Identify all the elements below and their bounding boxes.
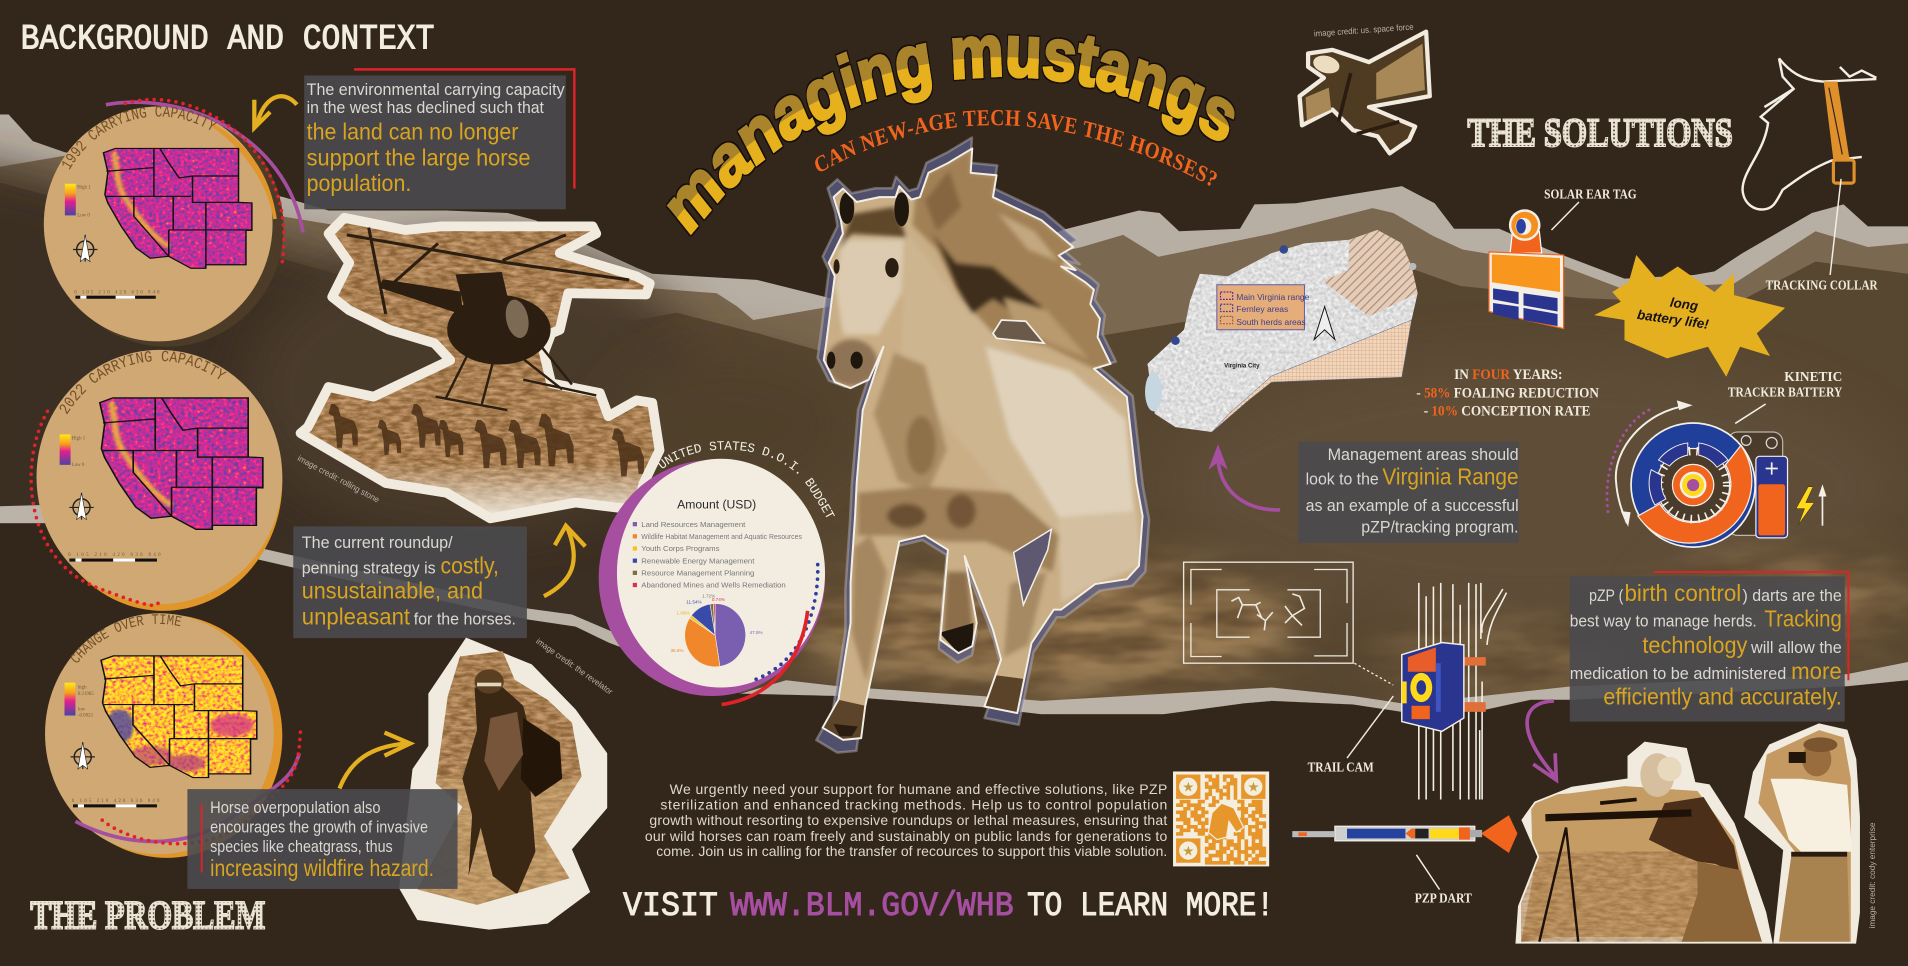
circuit board bbox=[1728, 432, 1783, 535]
text box: pZP darts: medication to be administered bbox=[1570, 665, 1786, 683]
rotor bbox=[1631, 423, 1755, 547]
text box: pZP darts: ) darts are the bbox=[1743, 587, 1842, 605]
pie labels bbox=[670, 593, 763, 653]
QR code: ★ bbox=[1247, 780, 1259, 795]
Virginia Range map bbox=[1144, 225, 1424, 438]
subtitle arc: CAN NEW-AGE TECH SAVE THE HORSES? bbox=[815, 110, 1217, 186]
text box: Virginia range: Virginia Range bbox=[1382, 463, 1519, 489]
arrow: to 1992 map bbox=[254, 96, 297, 128]
mane bbox=[913, 148, 1111, 369]
up arrow bbox=[1821, 492, 1823, 526]
map circle: change over time: 0 105 210 420 630 840 bbox=[72, 799, 160, 804]
text box: carrying capacity: The environmental carrying capacity bbox=[307, 81, 565, 99]
photo credit: the revelator: image credit: the revelator bbox=[534, 636, 615, 697]
stat block: PZP results: - 58% FOALING REDUCTION bbox=[1416, 385, 1599, 401]
pie chart panel: U.S. D.O.I. budget bbox=[598, 441, 835, 706]
pie labels: 1.69% bbox=[677, 611, 690, 616]
arrow: to firefighter bbox=[339, 733, 410, 789]
lower gray ridge bbox=[0, 505, 45, 524]
stat block: PZP results: IN FOUR YEARS: bbox=[1454, 367, 1562, 383]
text box: roundup strategy: unpleasant bbox=[302, 604, 411, 630]
map circle: change over time: -0.0823 bbox=[78, 714, 93, 719]
text box: pZP darts: efficiently and accurately. bbox=[1603, 684, 1842, 710]
label: PZP DART bbox=[1415, 892, 1472, 907]
text box: pZP darts: best way to manage herds. bbox=[1570, 613, 1757, 631]
text box: carrying capacity: support the large horse bbox=[307, 144, 531, 170]
QR code: ★ bbox=[1182, 843, 1194, 858]
icon: tree trunks bbox=[1419, 583, 1506, 799]
landscape photo band bbox=[0, 110, 1908, 754]
battery bbox=[1756, 456, 1788, 538]
pie bbox=[685, 604, 746, 667]
text box: pZP darts: will allow the bbox=[1750, 639, 1842, 657]
text box: wildfire hazard bbox=[187, 789, 458, 889]
map bbox=[101, 656, 257, 778]
map circle: change over time: high bbox=[78, 686, 87, 691]
map circle: 1992 carrying capacity: High 1 bbox=[77, 186, 91, 191]
text box: Virginia range: as an example of a successful bbox=[1306, 497, 1519, 515]
legend: Renewable Energy Management bbox=[641, 556, 755, 565]
call-to-action paragraph: sterilization and enhanced tracking methods. Help us to control population bbox=[660, 796, 1167, 812]
place label: Virginia City bbox=[1224, 362, 1260, 369]
legend bbox=[60, 434, 71, 465]
text box: carrying capacity: in the west has declined such that bbox=[307, 99, 544, 117]
text box: pZP darts: technology bbox=[1642, 632, 1748, 658]
call-to-action paragraph: come. Join us in calling for the transfer of recources to support this viable solution. bbox=[656, 843, 1167, 859]
heading: background and context: BACKGROUND AND CONTEXT bbox=[21, 20, 434, 60]
stat block: PZP results: - 10% CONCEPTION RATE bbox=[1424, 404, 1590, 420]
label: KINETIC bbox=[1784, 369, 1842, 384]
photo cutout: helicopter and horses bbox=[292, 207, 669, 529]
compass bbox=[73, 235, 97, 262]
legend: Wildlife Habitat Management and Aquatic Resources bbox=[641, 532, 802, 541]
herd silhouettes bbox=[329, 404, 644, 477]
arc label: 2022 CARRYING CAPACITY bbox=[60, 350, 227, 414]
stat block: PZP results bbox=[1416, 367, 1599, 420]
call-to-action paragraph: growth without resorting to expensive roundups or lethal measures, ensuring that bbox=[649, 812, 1167, 828]
text box: roundup strategy bbox=[293, 526, 527, 638]
title arc: managing mustangs bbox=[666, 34, 1236, 236]
scale bar bbox=[73, 804, 157, 807]
arrow: to dart team bbox=[1527, 701, 1556, 780]
label: trail cam: TRAIL CAM bbox=[1308, 760, 1374, 775]
QR horse head bbox=[1208, 803, 1244, 840]
photo cutout: darting team bbox=[1517, 725, 1858, 942]
scale bar bbox=[75, 296, 156, 299]
kinetic tracker battery bbox=[1607, 369, 1843, 547]
horse shadow bbox=[816, 138, 1149, 753]
label: TRACKING COLLAR bbox=[1766, 279, 1878, 294]
call to action: visit website bbox=[623, 888, 1274, 926]
icon: solar ear tag bbox=[1489, 187, 1637, 329]
compass bbox=[71, 742, 95, 769]
map circle: 1992 carrying capacity: 0 105 210 420 630 840 bbox=[74, 290, 160, 295]
pie labels: 36.6% bbox=[670, 648, 684, 653]
photo credit: space force: image credit: us. space force bbox=[1314, 22, 1414, 39]
icon: horse with tracking collar bbox=[1743, 58, 1878, 294]
map circle: 2022 carrying capacity: 0 105 210 420 630 840 bbox=[68, 553, 161, 558]
text box: roundup strategy: The current roundup/ bbox=[302, 534, 453, 552]
southern herd area bbox=[1212, 320, 1412, 432]
text box: roundup strategy: for the horses. bbox=[414, 611, 516, 629]
lightning bbox=[1796, 487, 1814, 524]
mid hills bbox=[0, 183, 1908, 730]
map bbox=[100, 398, 263, 529]
text box: roundup strategy: costly, bbox=[440, 553, 499, 579]
text box: carrying capacity bbox=[304, 69, 574, 209]
legend: Resource Management Planning bbox=[641, 569, 754, 578]
kinetic tracker battery: TRACKER BATTERY bbox=[1728, 385, 1843, 400]
text box: carrying capacity: population. bbox=[307, 170, 411, 196]
text box: wildfire hazard: species like cheatgrass, thus bbox=[210, 838, 393, 856]
near shading bbox=[0, 131, 620, 647]
map circle: change over time: 0.21965 bbox=[78, 692, 94, 697]
call-to-action paragraph bbox=[645, 781, 1168, 859]
head bbox=[835, 240, 904, 335]
observer bbox=[1746, 725, 1858, 942]
pie labels: 1.72% bbox=[702, 593, 715, 598]
map circle: 2022 carrying capacity bbox=[29, 350, 282, 611]
arrow: to Virginia map bbox=[1218, 450, 1280, 510]
text box: wildfire hazard: increasing wildfire hazard. bbox=[210, 855, 434, 881]
shooter figure bbox=[1649, 797, 1740, 876]
firefighter figure bbox=[462, 669, 562, 894]
legend bbox=[64, 683, 75, 716]
starburst: long battery life: long bbox=[1669, 295, 1699, 314]
icon: PZP dart bbox=[1292, 815, 1517, 907]
arrow: to pie chart bbox=[544, 526, 585, 596]
call-to-action paragraph: our wild horses can roam freely and sustainably on public lands for generations to bbox=[645, 828, 1168, 844]
photo cutout: firefighter bbox=[399, 638, 607, 930]
call-to-action paragraph: We urgently need your support for humane and effective solutions, like PZP bbox=[670, 781, 1167, 797]
text box: pZP darts: pZP ( bbox=[1589, 587, 1624, 605]
text box: carrying capacity: the land can no longer bbox=[307, 118, 519, 144]
legs shading bbox=[852, 535, 887, 681]
facial features bbox=[827, 352, 835, 369]
map bbox=[103, 148, 252, 268]
hooves bbox=[823, 700, 865, 740]
neck and shoulder tones bbox=[900, 231, 1137, 535]
text box: pZP darts: birth control bbox=[1624, 580, 1741, 606]
call to action: visit website: VISIT bbox=[623, 888, 718, 926]
hazy far hills bbox=[0, 156, 1908, 351]
arc label: 1992 CARRYING CAPACITY bbox=[62, 106, 218, 170]
running horse icons bbox=[1231, 594, 1304, 630]
legend: Abandoned Mines and Wells Remediation bbox=[641, 581, 786, 590]
scale bar bbox=[69, 559, 157, 562]
map legend bbox=[1217, 285, 1310, 330]
map circle: 1992 carrying capacity bbox=[44, 98, 305, 346]
heading: the problem: THE PROBLEM bbox=[30, 892, 265, 937]
north arrow bbox=[1314, 307, 1335, 340]
text box: Virginia range: pZP/tracking program. bbox=[1361, 518, 1519, 536]
pie labels: 0.74% bbox=[712, 597, 725, 602]
icon: solar ear tag: SOLAR EAR TAG bbox=[1544, 187, 1637, 202]
arc label: CHANGE OVER TIME bbox=[70, 614, 182, 662]
text box: roundup strategy: penning strategy is bbox=[302, 560, 436, 578]
QR code: ★ bbox=[1182, 780, 1194, 795]
QR finder squares bbox=[1176, 775, 1266, 863]
highway shields bbox=[1171, 336, 1180, 345]
text box: pZP darts: more bbox=[1791, 658, 1842, 684]
photo credit: rolling stone: image credit: rolling stone bbox=[296, 453, 381, 505]
legend bbox=[65, 184, 76, 215]
starburst: long battery life bbox=[1594, 255, 1785, 377]
legend bbox=[633, 520, 802, 590]
helicopter bbox=[347, 228, 629, 410]
text box: pZP darts bbox=[1570, 572, 1848, 722]
main horse illustration bbox=[823, 148, 1143, 740]
legend: Land Resources Management bbox=[641, 520, 746, 529]
trail camera view frame bbox=[1184, 562, 1393, 758]
map circle: 2022 carrying capacity: High 1 bbox=[72, 436, 86, 441]
chart title: Amount (USD) bbox=[677, 498, 756, 512]
call to action: visit website: TO LEARN MORE! bbox=[1027, 888, 1274, 926]
text box: Virginia range: Management areas should bbox=[1328, 446, 1519, 464]
satellite cutout bbox=[1300, 32, 1430, 153]
QR code bbox=[1173, 771, 1269, 866]
text box: roundup strategy: unsustainable, and bbox=[302, 578, 483, 604]
icon: trail camera bbox=[1402, 642, 1486, 731]
shooter bbox=[1517, 743, 1770, 942]
text box: pZP darts: Tracking bbox=[1764, 606, 1842, 632]
map circle: change over time bbox=[45, 613, 302, 858]
hatched herd area bbox=[1323, 230, 1418, 316]
body gaps bbox=[993, 320, 1044, 343]
compass bbox=[69, 493, 94, 520]
heading: the solutions: THE SOLUTIONS bbox=[1468, 110, 1733, 155]
photo credit: cody enterprise: image credit: cody enterprise bbox=[1867, 822, 1877, 928]
map circle: change over time: low bbox=[78, 708, 86, 713]
legend: Youth Corps Programs bbox=[641, 544, 720, 553]
map legend: Fernley areas bbox=[1236, 304, 1288, 314]
rotation arrows bbox=[1616, 405, 1689, 523]
text box: Virginia range bbox=[1298, 442, 1519, 543]
starburst: long battery life: battery life! bbox=[1636, 307, 1710, 332]
arc heading: UNITED STATES D.O.I. BUDGET bbox=[658, 441, 835, 518]
call to action: visit website: WWW.BLM.GOV/WHB bbox=[730, 888, 1014, 926]
text box: wildfire hazard: encourages the growth of invasive bbox=[210, 818, 428, 836]
map legend: South herds areas bbox=[1236, 317, 1306, 327]
collar label line bbox=[1830, 179, 1841, 275]
text box: wildfire hazard: Horse overpopulation also bbox=[210, 799, 381, 817]
map circle: 1992 carrying capacity: Low 0 bbox=[77, 214, 90, 219]
pie labels: 47.5% bbox=[750, 630, 763, 635]
map legend: Main Virginia range bbox=[1236, 292, 1310, 302]
pie labels: 11.54% bbox=[686, 600, 702, 605]
text box: Virginia range: look to the bbox=[1306, 470, 1379, 488]
map circle: 2022 carrying capacity: Low 0 bbox=[72, 463, 85, 468]
